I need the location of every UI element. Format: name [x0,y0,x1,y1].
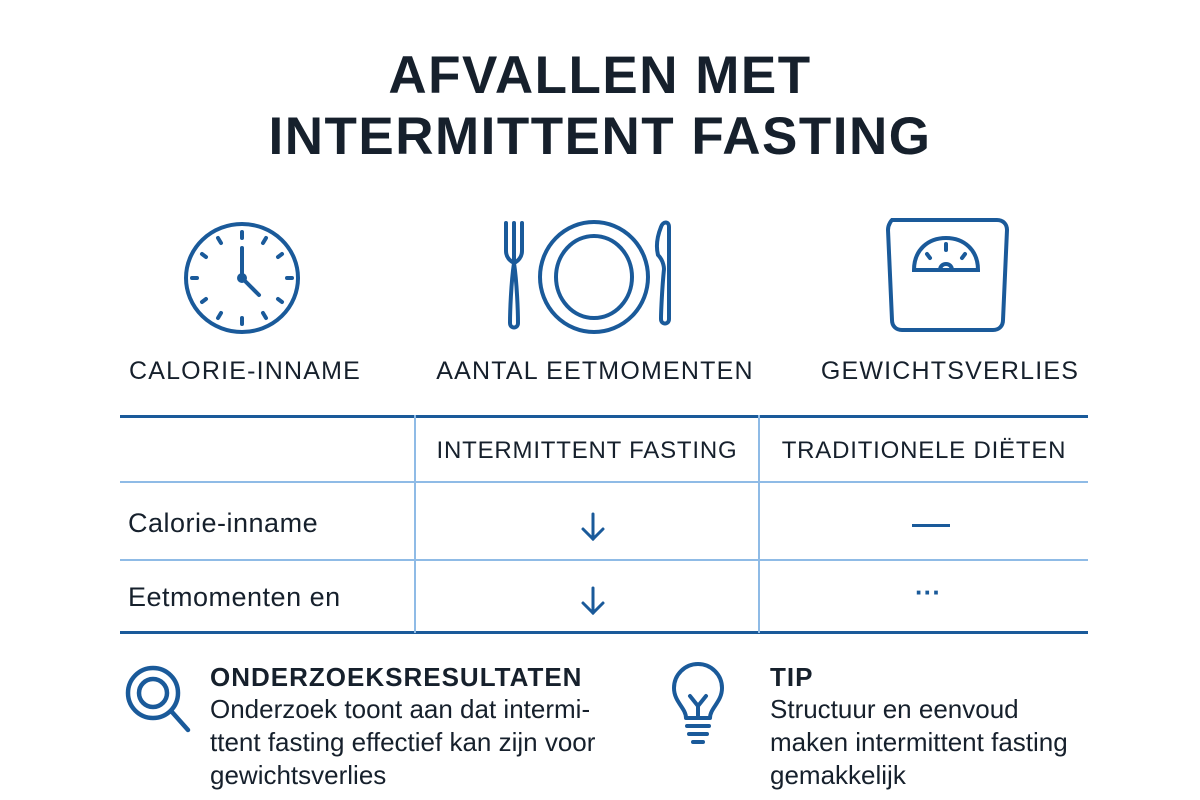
title: INTERMITTENT FASTING [268,107,932,166]
icon: magnifier [126,666,190,732]
label: calorie-inname: CALORIE-INNAME [129,357,361,385]
header: traditionele dieten: TRADITIONELE DIËTEN [782,437,1066,464]
icon: scale [886,218,1009,332]
research block: ONDERZOEKSRESULTATEN [210,662,582,692]
comparison table [120,415,1088,634]
header: intermittent fasting: INTERMITTENT FASTING [437,437,737,464]
arrow down [581,586,605,615]
label: gewichtsverlies: GEWICHTSVERLIES [821,357,1079,385]
tip block: Structuur en eenvoud [770,694,1019,724]
research block: gewichtsverlies [210,760,386,790]
ellipsis: ··· [915,577,941,607]
research block [210,662,595,790]
tip block: gemakkelijk [770,760,906,790]
label: aantal eetmomenten: AANTAL EETMOMENTEN [436,357,754,385]
title: AFVALLEN MET [388,46,812,105]
title [268,46,932,166]
icon: clock [184,222,300,334]
tip block: maken intermittent fasting [770,727,1068,757]
row label: calorie-inname: Calorie-inname [128,508,318,538]
tip block [770,662,1068,790]
arrow down [581,512,605,541]
dash [912,524,950,527]
tip block: TIP [770,662,813,692]
icon: lightbulb [672,662,724,744]
icon: plate with cutlery [504,220,671,334]
research block: ttent fasting effectief kan zijn voor [210,727,595,757]
research block: Onderzoek toont aan dat intermi- [210,694,590,724]
row label: eetmomenten: Eetmomenten en [128,582,341,612]
